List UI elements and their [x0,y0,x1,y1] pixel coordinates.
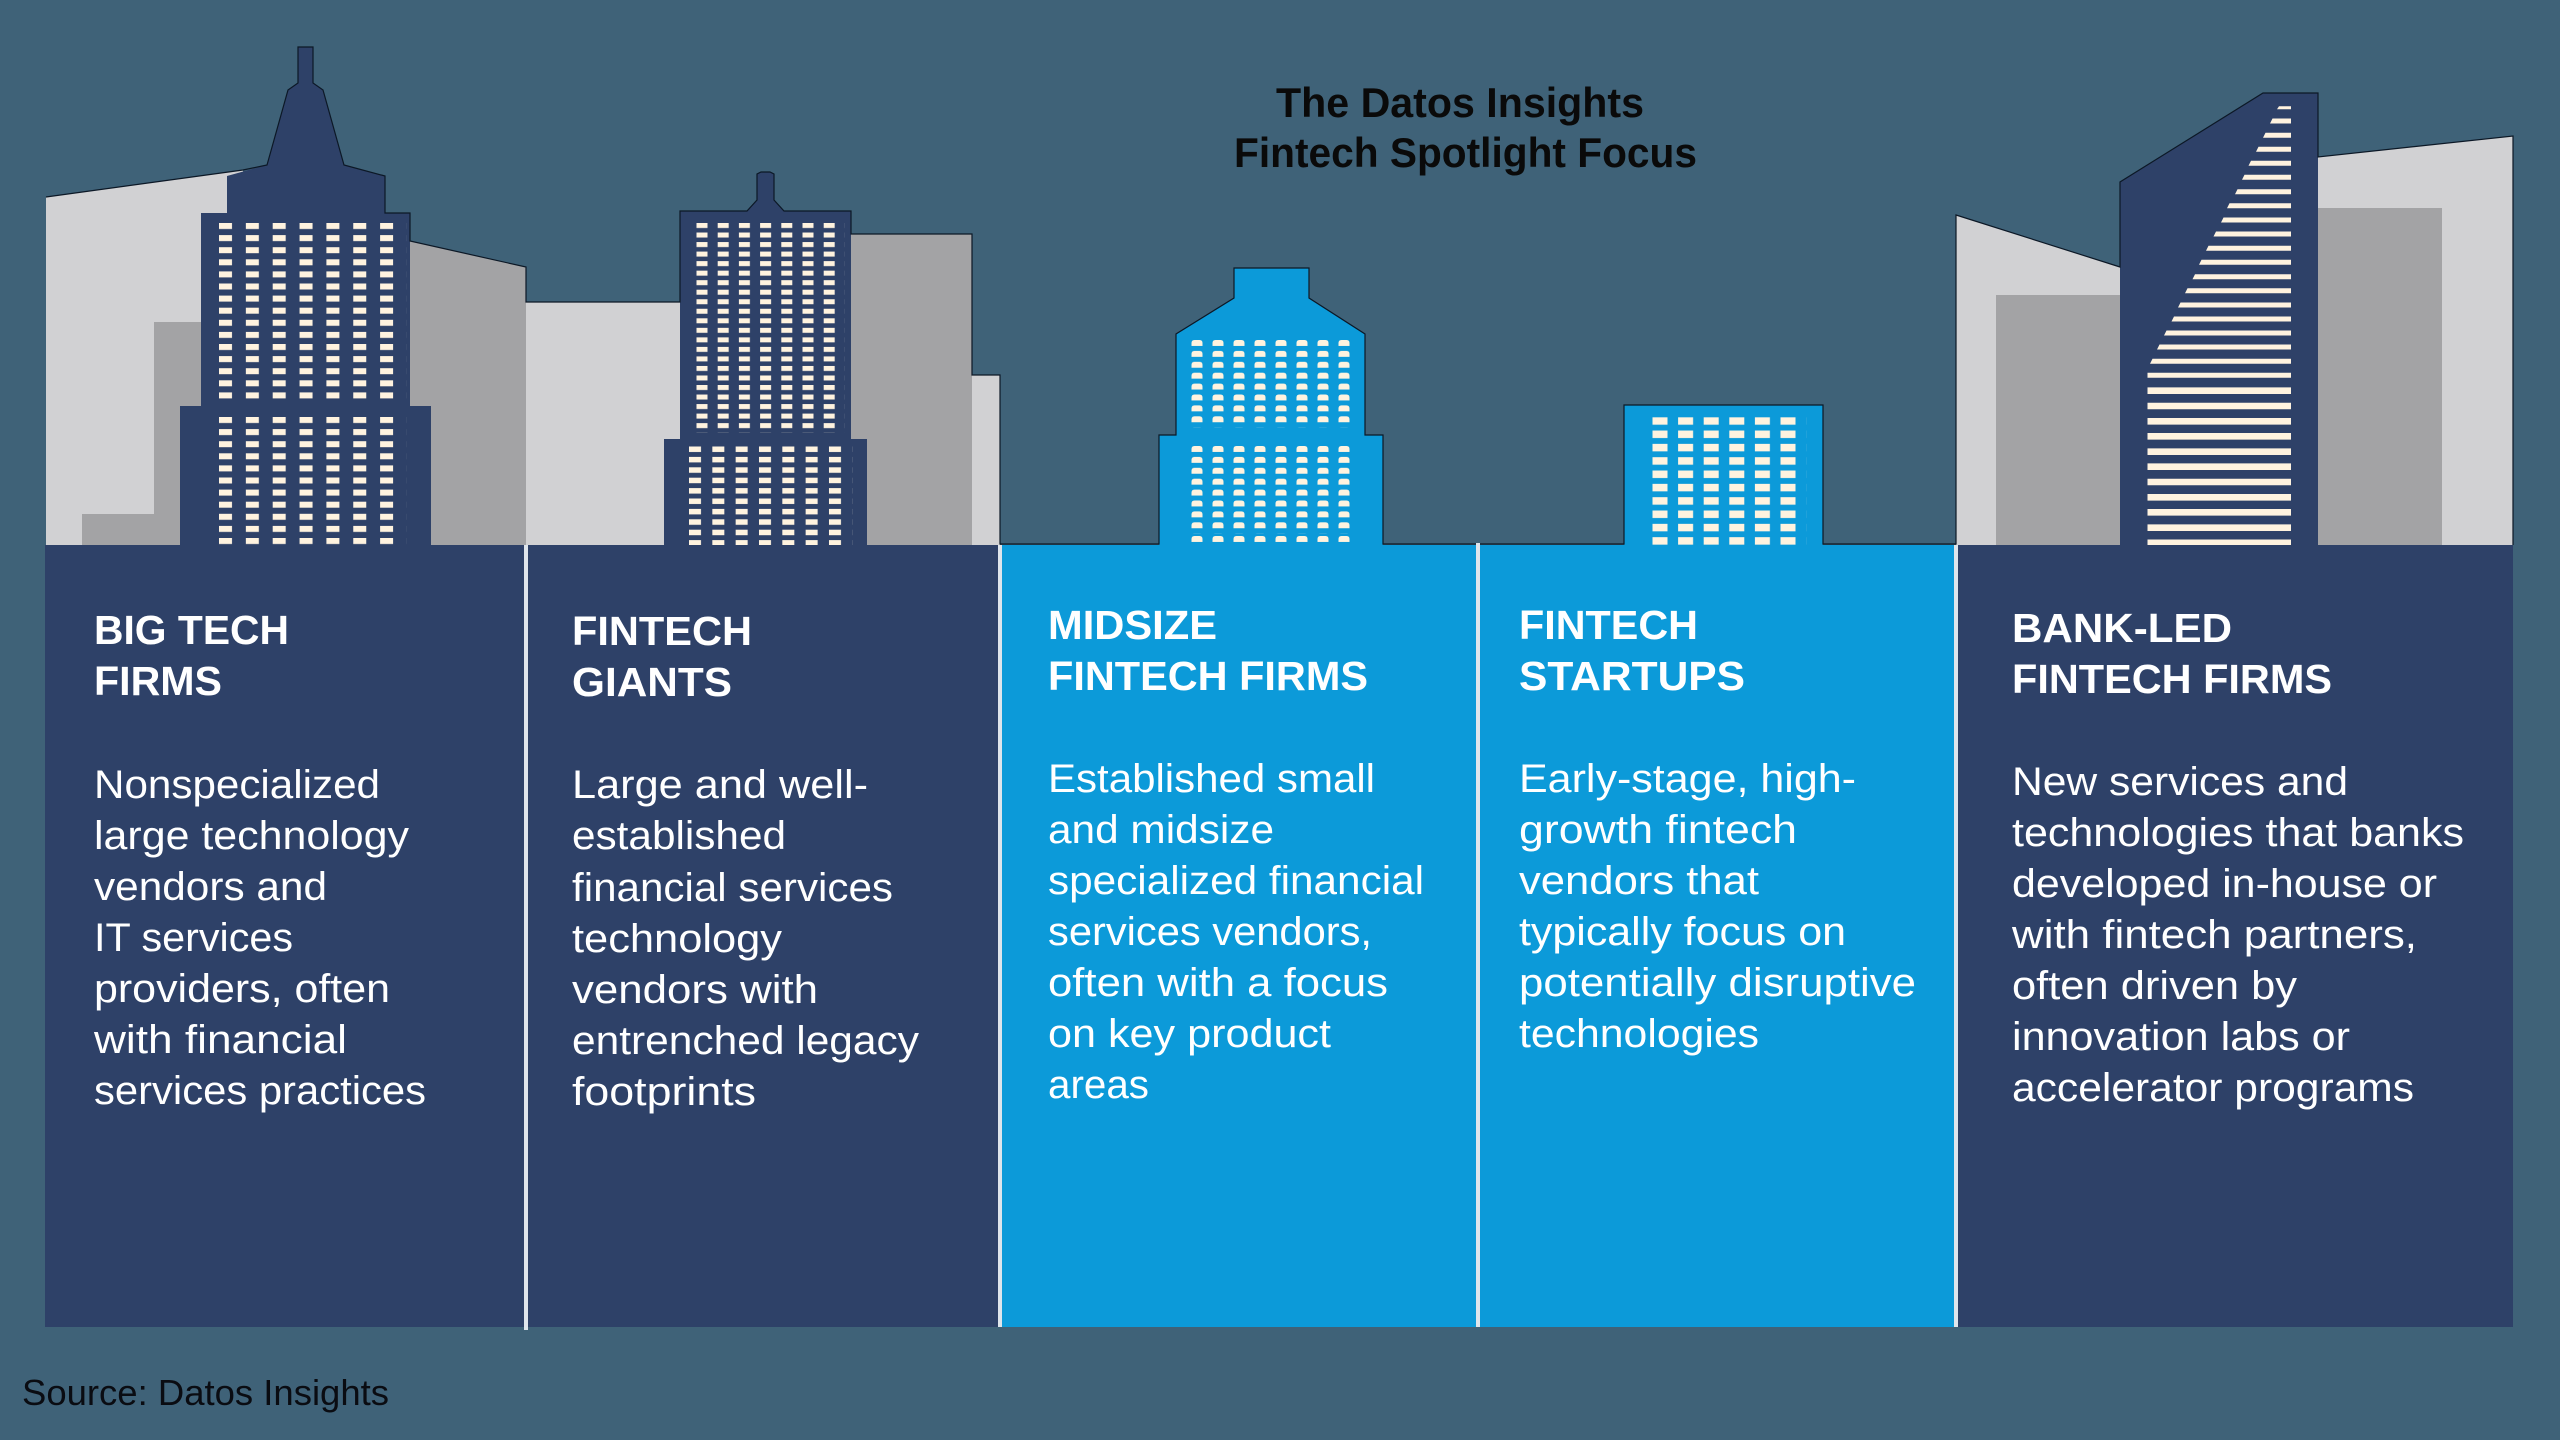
heading: midsize fintech firms: MIDSIZE [1048,602,1217,648]
description: big tech firms: IT services [94,916,293,960]
description: midsize fintech firms: specialized financial [1048,859,1424,903]
description: big tech firms: vendors and [94,865,327,909]
panel: big tech firms [45,545,526,1327]
description: bank-led fintech firms: New services and [2012,760,2348,804]
panel: fintech giants [526,545,1000,1327]
description: midsize fintech firms: Established small [1048,757,1375,801]
description: bank-led fintech firms: with fintech partners, [2011,913,2417,957]
description: fintech giants: established [572,814,786,858]
description: midsize fintech firms: on key product [1048,1012,1331,1056]
title: The Datos Insights [1276,79,1644,126]
heading: big tech firms [94,607,289,704]
description: midsize fintech firms: often with a focus [1048,961,1388,1005]
description: big tech firms: large technology [94,814,409,858]
panel: fintech startups [1478,545,1956,1327]
heading: bank-led fintech firms: FINTECH FIRMS [2012,656,2332,702]
description: big tech firms: with financial [93,1018,347,1062]
description: big tech firms [93,763,426,1113]
description: midsize fintech firms: services vendors, [1048,910,1372,954]
title: Fintech Spotlight Focus [1234,129,1697,176]
description: bank-led fintech firms: innovation labs or [2012,1015,2350,1059]
description: fintech giants: entrenched legacy [572,1019,919,1063]
description: big tech firms: Nonspecialized [94,763,380,807]
title [1234,79,1697,176]
building group: fintech giants [526,172,1000,546]
heading: midsize fintech firms [1048,602,1368,699]
panel: midsize fintech firms [1000,545,1478,1327]
description: fintech giants [572,763,919,1114]
heading: big tech firms: BIG TECH [94,607,289,653]
building group: big tech firms [46,47,526,545]
heading: midsize fintech firms: FINTECH FIRMS [1048,653,1368,699]
heading: fintech giants [572,608,752,705]
description: fintech startups: potentially disruptive [1519,961,1916,1005]
heading: fintech giants: GIANTS [572,659,732,705]
description: fintech startups [1519,757,1916,1056]
description: fintech startups: Early-stage, high- [1519,757,1856,801]
heading: fintech giants: FINTECH [572,608,752,654]
source note: Source: Datos Insights [22,1372,389,1413]
description: fintech giants: financial services [572,866,893,910]
description: big tech firms: services practices [94,1069,426,1113]
description: fintech startups: vendors that [1519,859,1759,903]
description: bank-led fintech firms [2011,760,2464,1110]
skyline outline [46,47,2513,545]
description: bank-led fintech firms: accelerator programs [2012,1066,2414,1110]
building: fintech startups [1624,405,1823,546]
description: bank-led fintech firms: developed in-house or [2012,862,2437,906]
description: bank-led fintech firms: technologies that banks [2012,811,2464,855]
description: midsize fintech firms: areas [1048,1063,1149,1107]
heading: bank-led fintech firms: BANK-LED [2012,605,2232,651]
building: midsize fintech firms [1159,268,1383,545]
description: midsize fintech firms [1048,757,1424,1107]
panel: bank-led fintech firms [1956,545,2513,1327]
description: fintech giants: Large and well- [572,763,868,807]
description: fintech startups: technologies [1519,1012,1759,1056]
description: fintech giants: technology [572,917,782,961]
description: midsize fintech firms: and midsize [1048,808,1274,852]
description: fintech giants: footprints [572,1070,756,1114]
description: fintech giants: vendors with [572,968,818,1012]
description: bank-led fintech firms: often driven by [2012,964,2297,1008]
description: fintech startups: growth fintech [1519,808,1797,852]
description: fintech startups: typically focus on [1519,910,1846,954]
heading: bank-led fintech firms [2012,605,2332,702]
heading: fintech startups: FINTECH [1519,602,1698,648]
heading: fintech startups: STARTUPS [1519,653,1745,699]
building group: bank-led fintech firms [1956,93,2513,545]
heading: big tech firms: FIRMS [94,658,222,704]
heading: fintech startups [1519,602,1745,699]
description: big tech firms: providers, often [94,967,390,1011]
